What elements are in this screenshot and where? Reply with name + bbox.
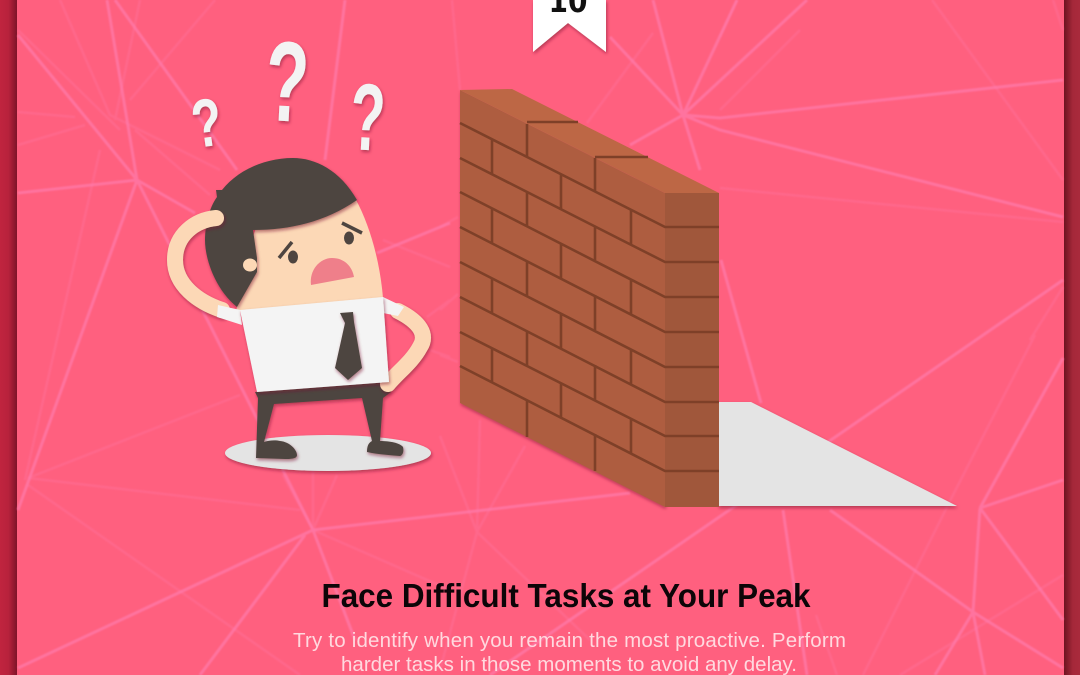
left border — [0, 0, 17, 675]
confused man character — [175, 158, 431, 471]
right border — [1064, 0, 1080, 675]
body line 1: Try to identify when you remain the most proactive. Perform — [293, 629, 846, 652]
title: Face Difficult Tasks at Your Peak — [322, 577, 811, 614]
middle question mark: ? — [262, 18, 312, 147]
hair — [205, 158, 357, 307]
mouth — [311, 258, 354, 285]
wall top face — [460, 89, 719, 193]
head — [236, 198, 383, 312]
trousers and shoes — [255, 382, 403, 459]
mortar lines — [460, 122, 719, 471]
ribbon shape — [533, 0, 606, 52]
wall end face — [665, 193, 719, 507]
right arm — [388, 311, 423, 384]
wall cast shadow — [718, 402, 957, 506]
left question mark: ? — [187, 83, 227, 163]
body text — [293, 629, 846, 675]
right question mark: ? — [348, 63, 388, 171]
brick wall with shadow — [460, 89, 957, 507]
face — [279, 223, 362, 285]
eyebrows — [279, 223, 362, 258]
tie — [335, 312, 362, 380]
raised arm — [175, 218, 222, 310]
bookmark ribbon with number — [533, 0, 606, 52]
ear — [243, 258, 257, 272]
eyes — [288, 232, 354, 264]
shirt sleeves — [217, 297, 404, 325]
floor shadow ellipse — [225, 435, 431, 471]
wall front face — [460, 90, 665, 507]
icon: question marks — [187, 18, 388, 171]
shirt — [240, 297, 389, 392]
